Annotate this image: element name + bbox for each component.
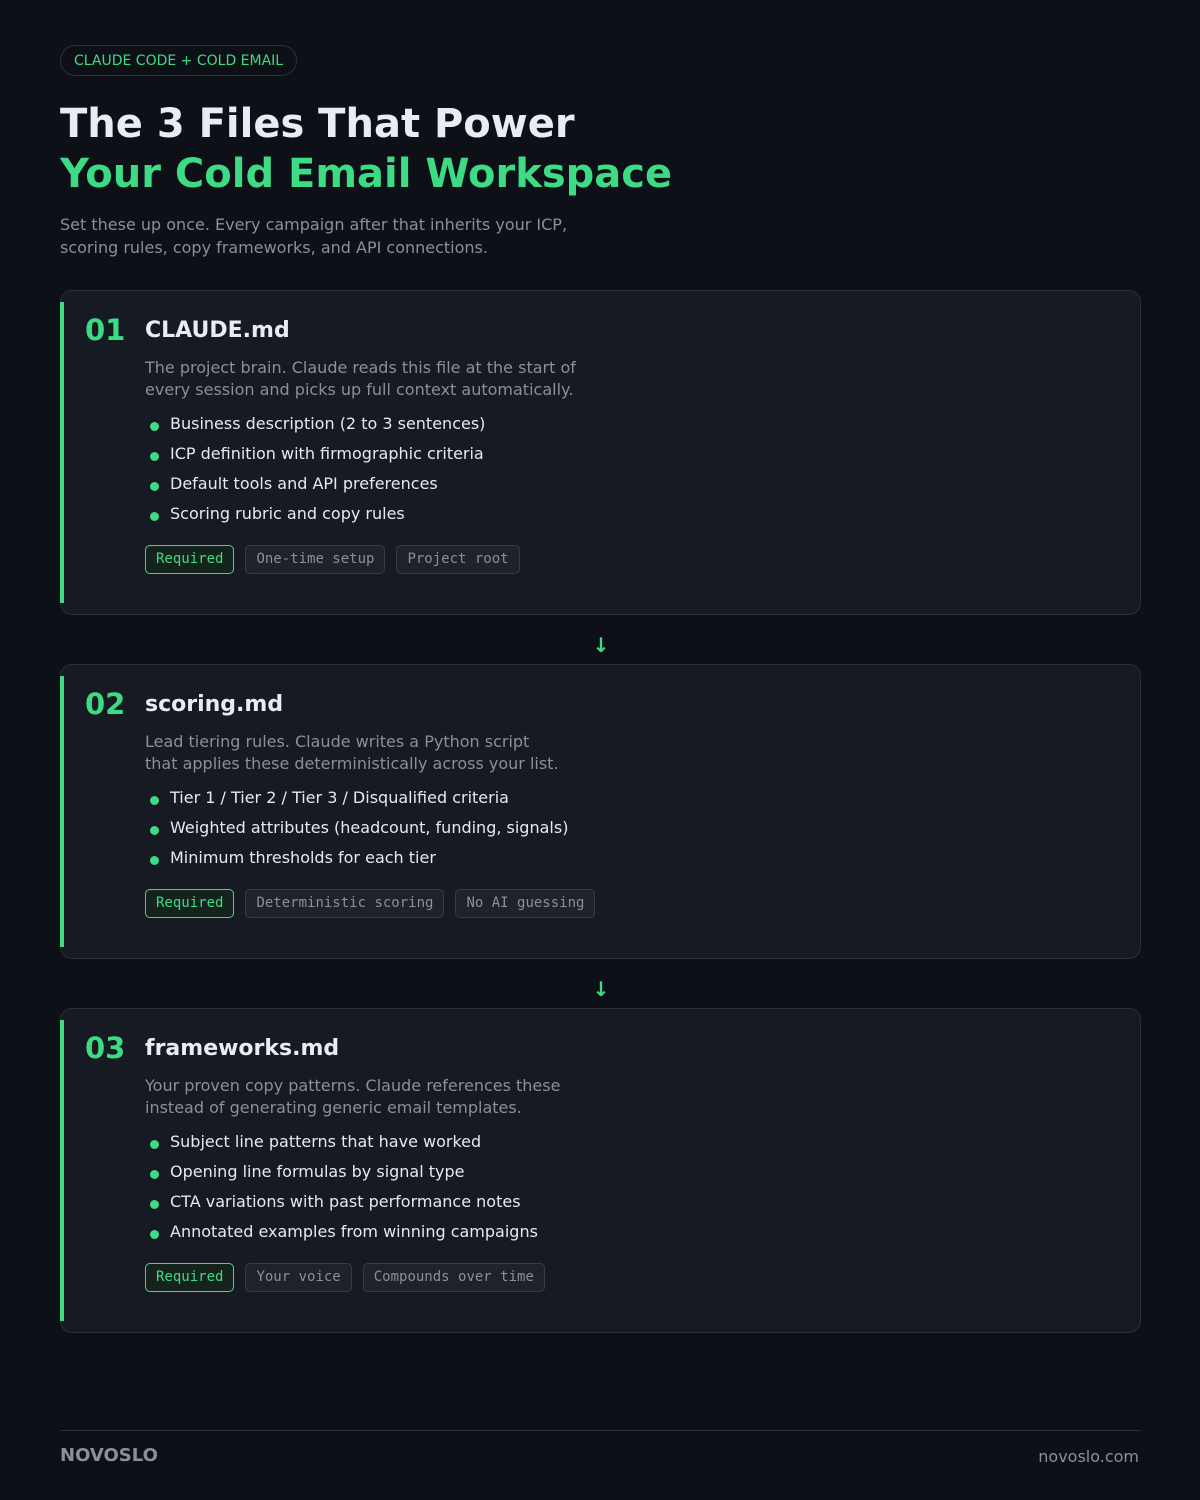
- tags: Deterministic scoring: [256, 895, 433, 911]
- heading: 03 frameworks.md: [85, 1031, 339, 1065]
- tags: [145, 545, 520, 574]
- tags: Compounds over time: [374, 1269, 534, 1285]
- tags: No AI guessing: [466, 895, 584, 911]
- description: that applies these deterministically across your list.: [145, 754, 559, 773]
- bullet list: Annotated examples from winning campaigns: [170, 1222, 538, 1241]
- bullet list: CTA variations with past performance notes: [170, 1192, 521, 1211]
- panel: CLAUDE.md: 01: [85, 313, 125, 347]
- description: [144, 358, 576, 399]
- bullet list: Minimum thresholds for each tier: [170, 848, 436, 867]
- bullet list: Business description (2 to 3 sentences): [170, 414, 485, 433]
- footer url: novoslo.com: [1038, 1447, 1139, 1466]
- title: [60, 101, 672, 197]
- description: every session and picks up full context automatically.: [145, 380, 573, 399]
- tags: Your voice: [256, 1269, 341, 1285]
- tags: [145, 1263, 545, 1292]
- description: [145, 1076, 560, 1117]
- bullet list: ICP definition with firmographic criteria: [170, 444, 484, 463]
- tags: Required: [156, 551, 223, 567]
- arrow: ↓: [593, 977, 609, 1001]
- bullet list: Weighted attributes (headcount, funding, signals): [170, 818, 568, 837]
- tags: Required: [156, 1269, 223, 1285]
- bullet list: Tier 1 / Tier 2 / Tier 3 / Disqualified criteria: [170, 788, 509, 807]
- panel: CLAUDE.md: [60, 290, 1141, 615]
- tags: One-time setup: [256, 551, 374, 567]
- bullet list: [150, 414, 485, 523]
- bullet list: Scoring rubric and copy rules: [170, 504, 405, 523]
- tag pill: CLAUDE CODE + COLD EMAIL: [74, 53, 283, 69]
- tags: [145, 889, 595, 918]
- bullet list: Default tools and API preferences: [170, 474, 438, 493]
- description: instead of generating generic email templates.: [145, 1098, 522, 1117]
- tag pill: [60, 45, 297, 76]
- subtitle: scoring rules, copy frameworks, and API connections.: [60, 238, 488, 257]
- panel: frameworks.md: 03: [85, 1031, 125, 1065]
- description: Your proven copy patterns. Claude references these: [145, 1076, 560, 1095]
- heading: 02 scoring.md: scoring.md: [145, 692, 283, 716]
- footer brand: NOVOSLO: [60, 1445, 158, 1466]
- bullet list: Subject line patterns that have worked: [170, 1132, 481, 1151]
- tags: Required: [156, 895, 223, 911]
- heading: 01 CLAUDE.md: CLAUDE.md: [145, 318, 290, 342]
- title: Your Cold Email Workspace: [60, 151, 672, 197]
- description: The project brain. Claude reads this file at the start of: [145, 358, 576, 377]
- bullet list: [150, 788, 568, 867]
- subtitle: Set these up once. Every campaign after that inherits your ICP,: [60, 215, 567, 234]
- panel: frameworks.md: [60, 1008, 1141, 1333]
- bullet list: [150, 1132, 538, 1241]
- panel: scoring.md: [60, 664, 1141, 959]
- panel: scoring.md: 02: [85, 687, 125, 721]
- heading: 01 CLAUDE.md: [85, 313, 290, 347]
- bullet list: Opening line formulas by signal type: [170, 1162, 465, 1181]
- description: [145, 732, 559, 773]
- subtitle: [60, 215, 567, 257]
- description: Lead tiering rules. Claude writes a Python script: [145, 732, 529, 751]
- arrow: ↓: [593, 633, 609, 657]
- tags: Project root: [407, 551, 509, 567]
- title: The 3 Files That Power: [60, 101, 575, 147]
- heading: 02 scoring.md: [85, 687, 283, 721]
- heading: 03 frameworks.md: frameworks.md: [145, 1036, 339, 1060]
